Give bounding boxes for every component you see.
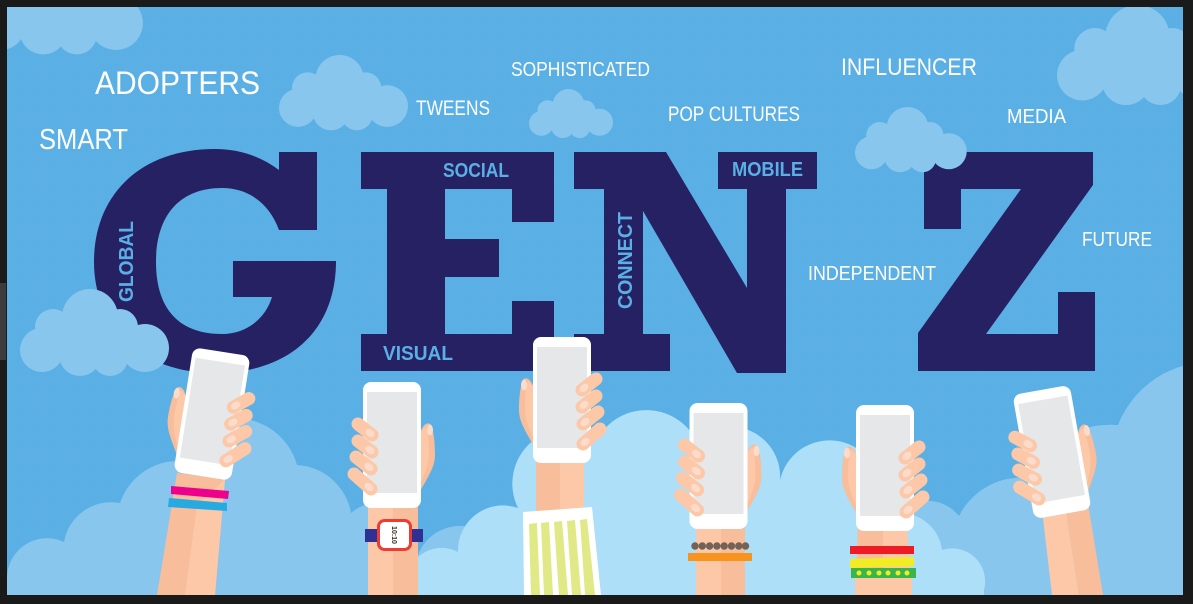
hand 6: bare arm	[1004, 382, 1105, 595]
word: SOCIAL: SOCIAL	[443, 160, 509, 182]
hand 2: smart watch	[354, 382, 435, 595]
wristband: pink	[171, 486, 229, 499]
hand 1: pink and blue bands	[157, 345, 259, 595]
word: INFLUENCER: INFLUENCER	[841, 54, 977, 81]
cloud: top left	[7, 7, 143, 54]
word: POP CULTURES: POP CULTURES	[668, 103, 800, 126]
watch	[365, 520, 423, 550]
sleeve	[523, 507, 601, 595]
phone and fingers	[842, 405, 923, 531]
arm	[368, 500, 393, 595]
word: MEDIA: MEDIA	[1007, 106, 1067, 128]
hand 5: red yellow green bands	[842, 405, 923, 595]
hand 3: striped sleeve	[519, 337, 601, 595]
arm	[856, 528, 883, 568]
word: VISUAL: VISUAL	[383, 343, 453, 365]
phone and fingers	[168, 348, 256, 480]
wristband: green with dots	[851, 568, 916, 578]
letter G	[94, 149, 336, 373]
arm	[536, 461, 560, 511]
word: FUTURE: FUTURE	[1082, 229, 1152, 251]
cloud: left over G	[20, 289, 169, 376]
word: ADOPTERS: ADOPTERS	[95, 65, 260, 101]
phone and fingers	[354, 382, 435, 508]
arm	[696, 528, 721, 595]
phone and fingers	[1004, 382, 1105, 521]
phone and fingers	[519, 337, 600, 463]
bead bracelet	[691, 542, 749, 550]
letter Z	[918, 152, 1095, 371]
wristband: blue	[168, 498, 227, 511]
watch: 10:10	[390, 526, 397, 544]
left edge tab	[0, 283, 6, 360]
cloud bank: light blue	[418, 410, 985, 595]
word: MOBILE: MOBILE	[732, 159, 803, 181]
wristband: red	[850, 546, 914, 554]
word: TWEENS: TWEENS	[416, 97, 490, 120]
word: INDEPENDENT: INDEPENDENT	[808, 263, 936, 285]
letter E	[361, 152, 554, 371]
arm	[157, 473, 225, 595]
word: GLOBAL: GLOBAL	[116, 221, 138, 302]
wristband: yellow	[850, 557, 914, 568]
letter N	[574, 152, 817, 373]
hand 4: beads and orange band	[680, 403, 762, 595]
wristband: orange	[688, 553, 752, 561]
headline GEN Z	[94, 149, 1095, 373]
phone and fingers	[680, 403, 762, 529]
cloud: over Z	[855, 107, 967, 172]
cloud: top right	[1057, 5, 1193, 105]
cloud bank: mid blue left	[7, 418, 470, 595]
word: SOPHISTICATED: SOPHISTICATED	[511, 59, 650, 81]
cloud: small centre	[529, 89, 613, 138]
word: SMART: SMART	[39, 124, 128, 156]
word: CONNECT: CONNECT	[615, 212, 637, 309]
arm	[1042, 505, 1079, 595]
cloud: near tweens	[279, 55, 408, 130]
cloud bank: mid blue right	[900, 364, 1190, 595]
